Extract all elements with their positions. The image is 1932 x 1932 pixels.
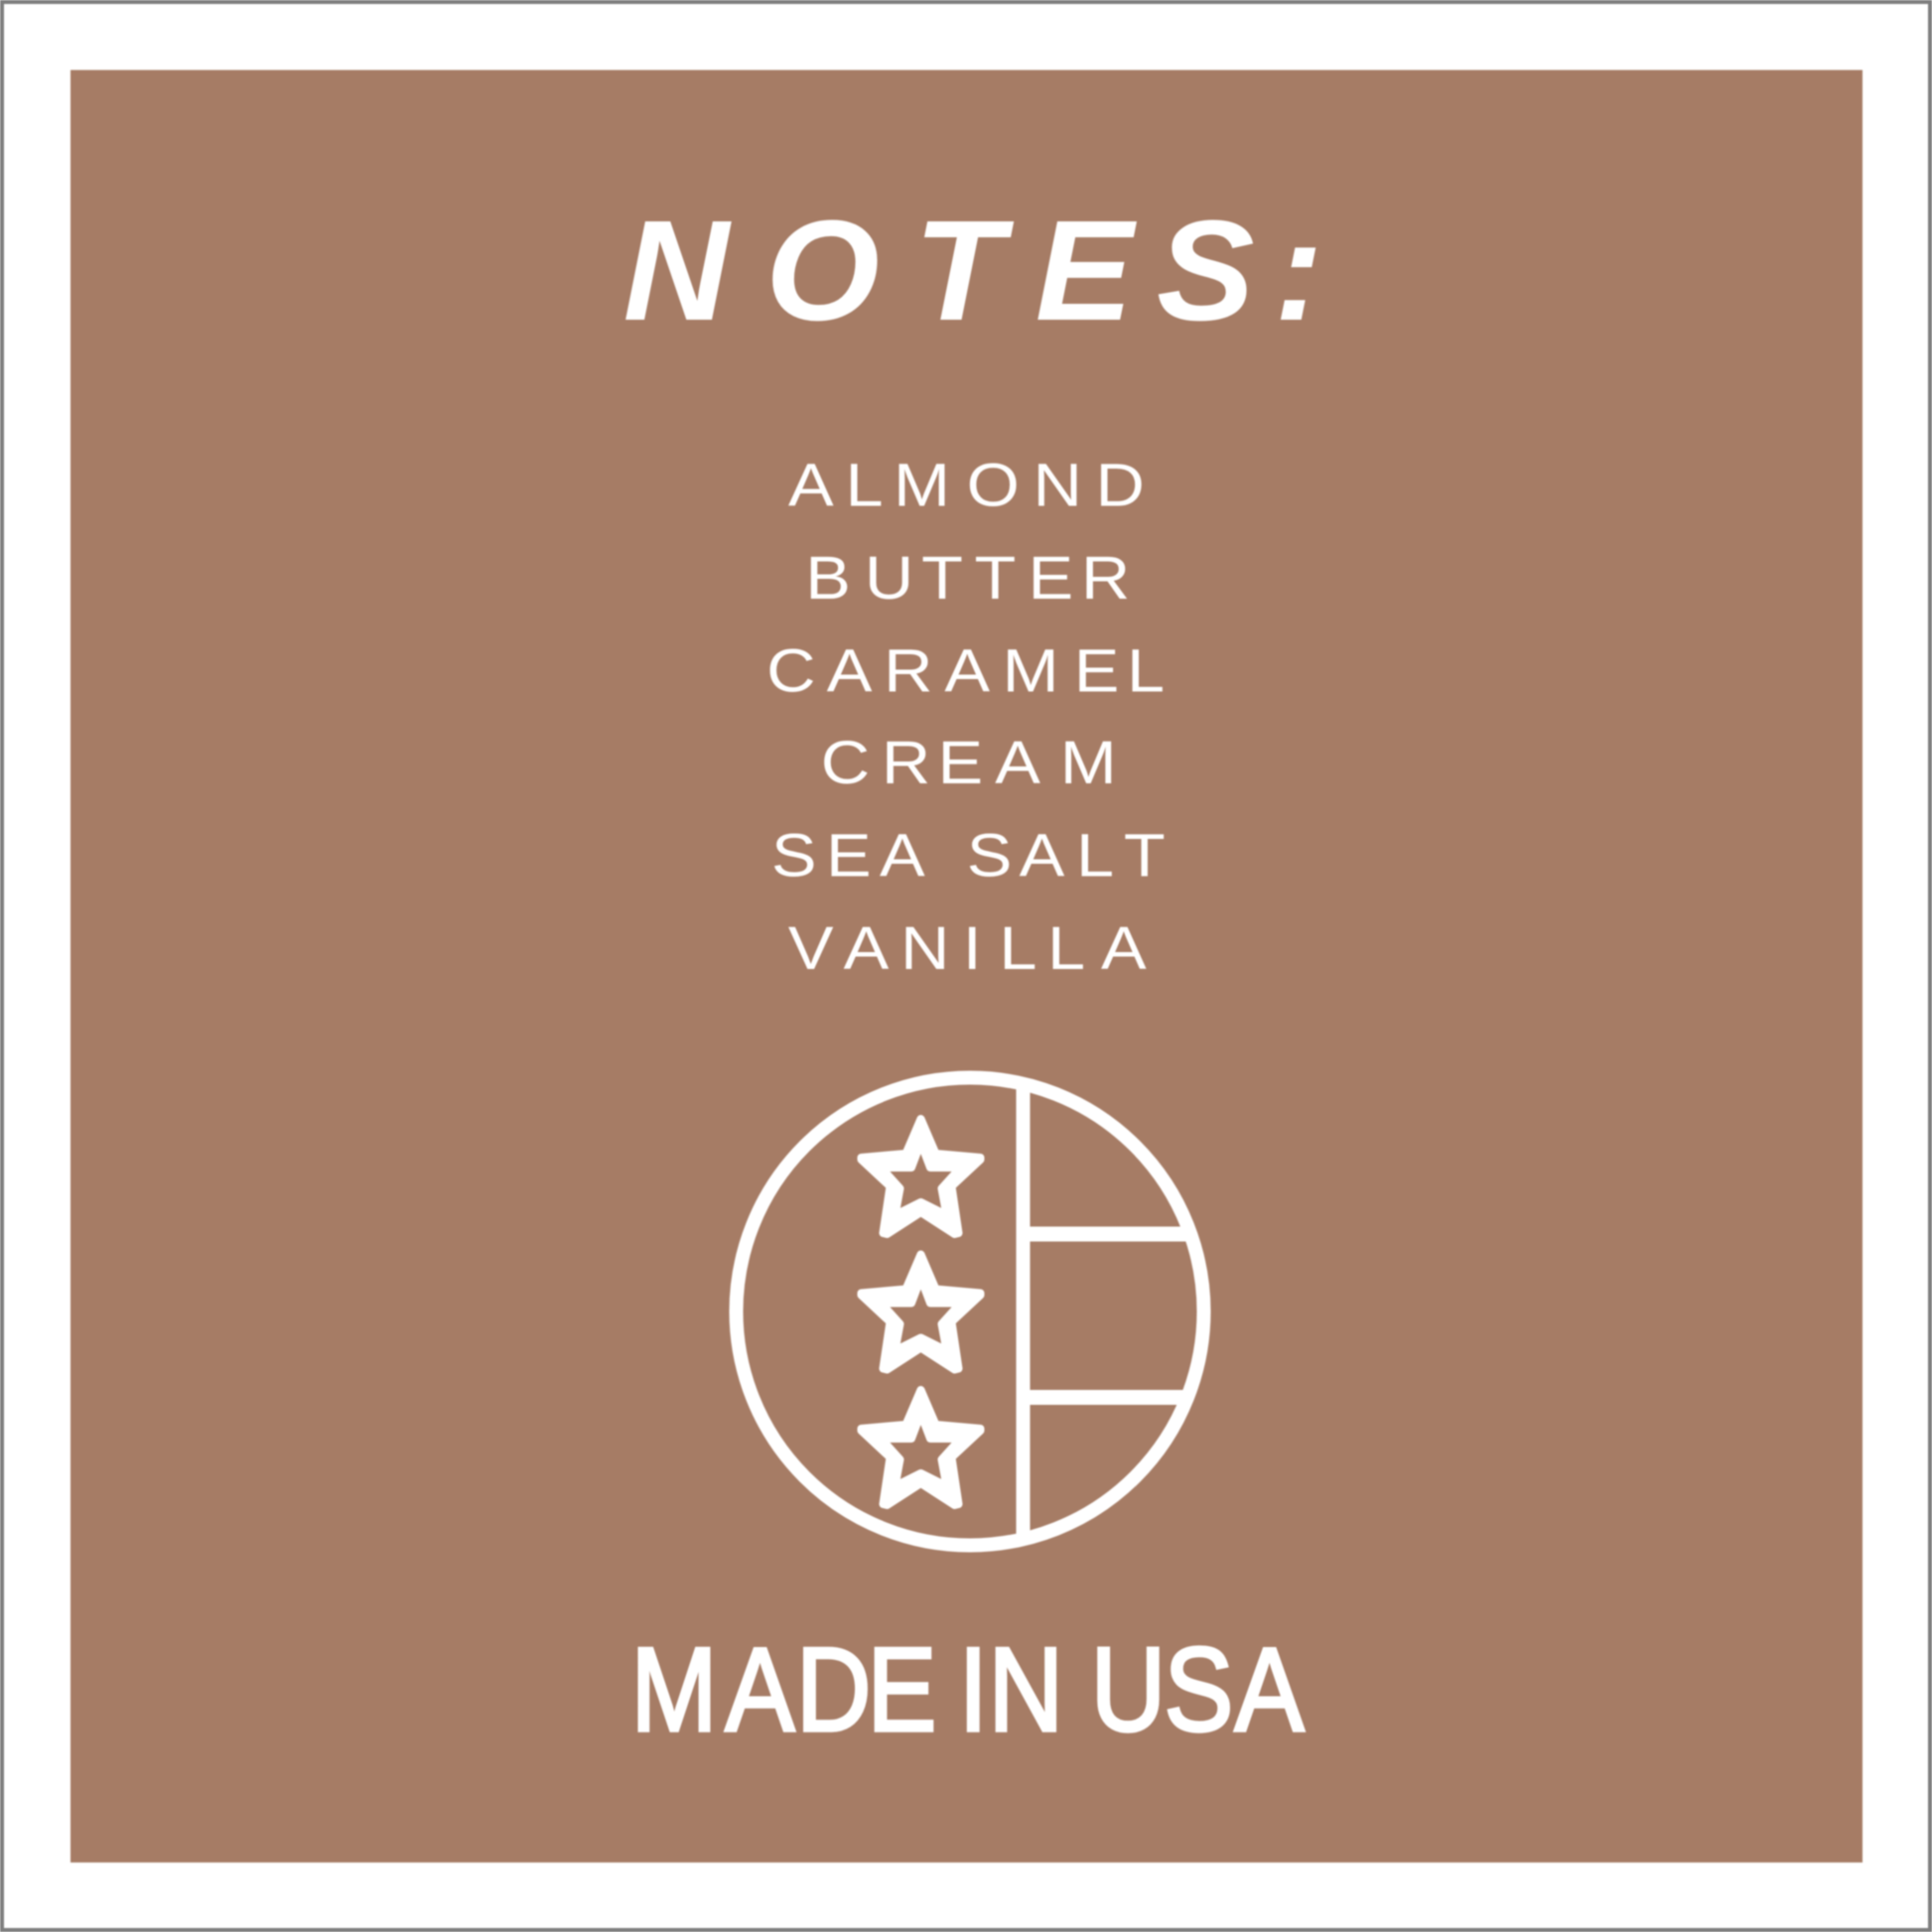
title: notes: NOTES:: [623, 191, 1323, 350]
star: middle: [862, 1255, 981, 1370]
flag lower stripe line: [1023, 1390, 1190, 1405]
caption: made in usa: MADE IN USA: [631, 1622, 1304, 1756]
flag upper stripe line: [1023, 1227, 1191, 1241]
badge circle: [737, 1078, 1203, 1545]
note: sea salt: SEA SALT: [771, 821, 1166, 890]
flag vertical divider: [1017, 1084, 1031, 1539]
icon: american flag globe badge: [737, 1078, 1203, 1545]
note: caramel: CARAMEL: [766, 636, 1165, 705]
note: vanilla: VANILLA: [788, 914, 1147, 982]
note: butter: BUTTER: [805, 544, 1130, 612]
star: bottom: [862, 1390, 981, 1505]
star: top: [862, 1119, 981, 1234]
note: cream: CREAM: [821, 729, 1117, 796]
list: tasting notes: [766, 451, 1166, 982]
note: almond: ALMOND: [788, 451, 1145, 519]
